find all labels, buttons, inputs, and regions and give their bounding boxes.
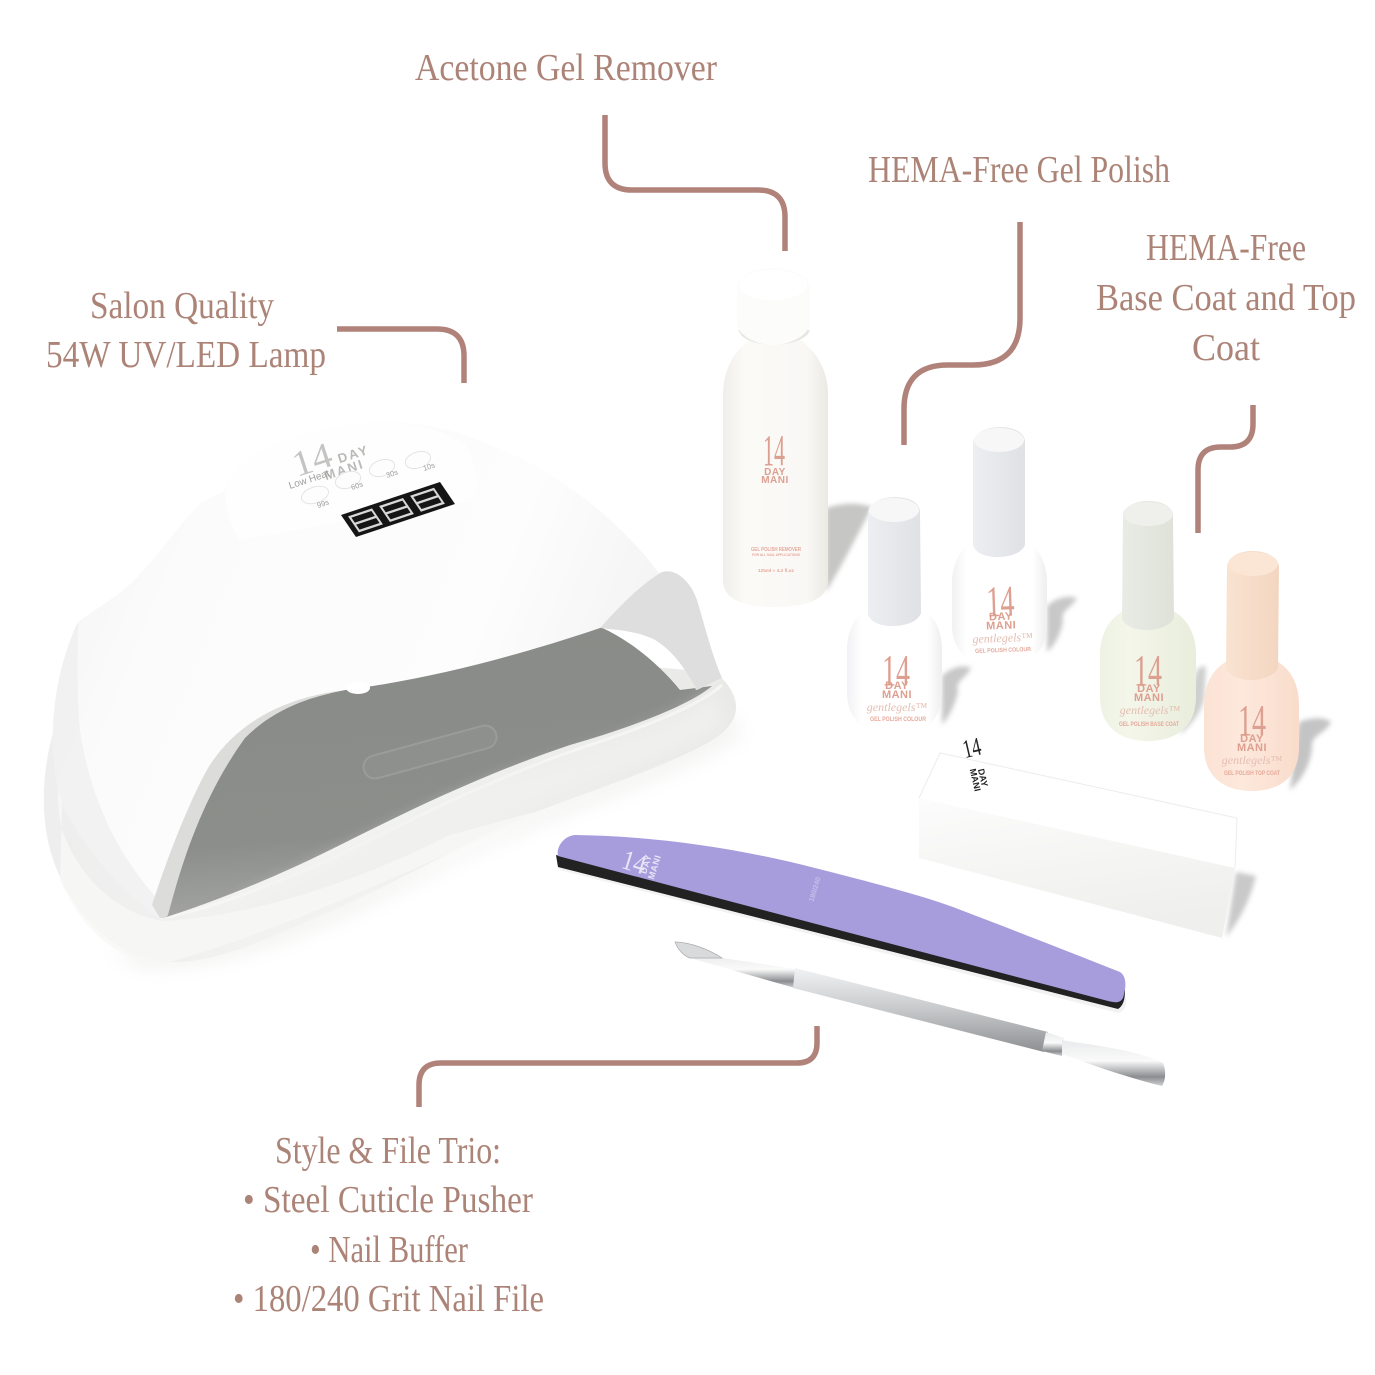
label: Salon Quality 54W UV/LED Lamp: 54W UV/LED Lamp xyxy=(46,334,326,376)
lamp interior xyxy=(163,627,712,918)
bottle logo: DAY xyxy=(1240,733,1264,745)
bottle logo xyxy=(970,576,1034,655)
UV LED lamp xyxy=(44,422,742,969)
bottle logo: 14 xyxy=(1238,696,1266,745)
cap top xyxy=(1228,552,1278,576)
bottle cap xyxy=(1226,551,1279,680)
top coat bottle xyxy=(1204,551,1331,791)
lamp interior pill xyxy=(375,737,485,767)
lamp soft floor shadow xyxy=(110,715,742,969)
bottle logo: DAY xyxy=(1137,683,1161,695)
bottle logo: MANI xyxy=(986,619,1016,632)
file black core xyxy=(556,855,1125,1009)
connector: gel polish xyxy=(904,222,1020,445)
connector: lamp xyxy=(337,329,464,383)
bottle body xyxy=(847,600,942,735)
connector: file trio xyxy=(419,1026,817,1107)
cuticle pusher xyxy=(675,942,1165,1086)
label: Salon Quality 54W UV/LED Lamp: Salon Quality xyxy=(90,285,274,327)
lamp button captions: 30s xyxy=(385,468,399,480)
base coat bottle xyxy=(1100,501,1206,741)
bottle shadow xyxy=(1047,597,1077,652)
gel polish colour bottle, front xyxy=(847,497,971,735)
bottle logo: DAY xyxy=(885,680,909,692)
buffer logo: DAY xyxy=(976,768,990,788)
connector: base and top coat xyxy=(1198,405,1253,533)
bottle logo: 14 xyxy=(882,646,910,695)
buffer logo: MANI xyxy=(968,768,983,792)
file logo: MANI xyxy=(646,854,663,880)
bottle shadow xyxy=(1290,718,1331,790)
gel remover bottle xyxy=(723,268,872,607)
bottle logo: gentlegels™ xyxy=(972,630,1033,646)
bottle cap xyxy=(973,427,1025,557)
lamp buttons xyxy=(299,448,433,507)
bottle logo: MANI xyxy=(1237,742,1267,754)
label: Salon Quality 54W UV/LED Lamp xyxy=(46,285,326,376)
file grit label: 180/240 xyxy=(809,876,823,903)
buffer shadow xyxy=(1226,872,1256,937)
lamp display xyxy=(341,482,455,537)
bottle logo: GEL POLISH COLOUR xyxy=(975,647,1032,655)
remover cap top xyxy=(739,270,807,300)
bottle logo: GEL POLISH TOP COAT xyxy=(1224,771,1280,777)
label: HEMA-Free Base Coat and Top Coat: Base Coat and Top xyxy=(1096,277,1356,319)
remover neck ring xyxy=(738,330,810,345)
bottle logo: MANI xyxy=(1134,692,1164,704)
lamp button captions: 60s xyxy=(350,480,364,492)
remover logo: DAY xyxy=(764,467,786,478)
label: Style and File Trio: • 180/240 Grit Nail File xyxy=(233,1278,544,1320)
buffer front face xyxy=(919,798,1235,938)
label: HEMA-Free Base Coat and Top Coat: HEMA-Free xyxy=(1146,227,1306,269)
cap top xyxy=(869,498,919,522)
buffer logo: 14 xyxy=(960,732,984,764)
bottle body xyxy=(1204,655,1299,791)
hood right rim band xyxy=(600,571,722,690)
nail buffer block xyxy=(919,732,1256,938)
hood left rim band xyxy=(152,690,345,918)
file logo: DAY xyxy=(638,853,654,875)
pusher shaft left xyxy=(690,954,795,988)
bottle body xyxy=(1100,605,1196,741)
bottle logo: GEL POLISH COLOUR xyxy=(870,717,927,723)
lamp logo xyxy=(287,423,375,491)
remover logo xyxy=(761,426,789,486)
bottle shadow xyxy=(1180,666,1206,735)
bottle cap xyxy=(868,497,921,626)
lamp button captions: 10s xyxy=(422,461,436,473)
buffer logo xyxy=(960,732,990,792)
lamp base xyxy=(44,640,736,962)
remover fine print xyxy=(751,547,801,573)
remover cap xyxy=(737,268,810,345)
remover shadow xyxy=(826,504,872,592)
label: Style and File Trio: Style & File Trio: xyxy=(275,1130,501,1172)
bottle logo: GEL POLISH BASE COAT xyxy=(1119,722,1179,728)
bottle shadow xyxy=(942,666,971,725)
cap top xyxy=(1123,502,1173,526)
file logo: 14 xyxy=(618,845,650,881)
bottle logo: gentlegels™ xyxy=(867,700,927,714)
lamp logo: 14 xyxy=(287,434,337,485)
remover fine print: GEL POLISH REMOVER xyxy=(751,547,801,553)
label: Style and File Trio: • Nail Buffer xyxy=(310,1229,468,1271)
bottle cap xyxy=(1122,501,1174,630)
bottle logo: gentlegels™ xyxy=(1120,703,1180,717)
pusher spoon end xyxy=(1062,1040,1165,1086)
remover fine print: FOR ALL NAIL APPLICATIONS xyxy=(752,552,800,557)
hood left shading xyxy=(53,622,163,918)
remover logo: MANI xyxy=(761,475,789,486)
hood xyxy=(53,422,720,918)
lamp button captions xyxy=(288,461,436,510)
bottle logo: gentlegels™ xyxy=(1222,753,1282,767)
cap top xyxy=(974,428,1024,452)
connector: remover xyxy=(605,115,785,251)
remover body xyxy=(723,338,828,607)
bottle logo: MANI xyxy=(882,689,912,701)
label: Style and File Trio xyxy=(233,1130,544,1320)
remover logo: 14 xyxy=(763,426,785,475)
bottle logo: 14 xyxy=(1134,646,1162,695)
bottle logo xyxy=(867,646,927,723)
file white edge xyxy=(557,858,1126,1013)
bottle body xyxy=(952,533,1047,667)
gel polish colour bottle, back xyxy=(952,427,1077,667)
bottle logo xyxy=(1222,696,1282,777)
lamp button captions: 99s xyxy=(316,498,330,510)
lamp logo: MANI xyxy=(322,456,366,483)
lamp interior pill inner xyxy=(375,737,485,767)
lamp base inner rim xyxy=(160,685,722,918)
label: HEMA-Free Base Coat and Top Coat: Coat xyxy=(1192,327,1260,369)
label: HEMA-Free Gel Polish: HEMA-Free Gel Polish xyxy=(868,149,1170,191)
nail file xyxy=(556,835,1126,1013)
pusher collar xyxy=(1042,1032,1064,1056)
label: HEMA-Free Base Coat and Top Coat xyxy=(1096,227,1356,369)
lamp base front edge xyxy=(58,740,560,962)
pusher handle xyxy=(793,968,1048,1052)
lamp interior floor glow xyxy=(230,695,725,935)
hood highlight xyxy=(346,682,370,694)
bottle logo: 14 xyxy=(986,577,1015,626)
bottle logo xyxy=(1119,646,1180,728)
pusher tip xyxy=(675,942,722,958)
buffer top face xyxy=(919,753,1237,868)
remover fine print: 125ml ℮ 4.2 fl.oz xyxy=(758,568,795,573)
label: Acetone Gel Remover: Acetone Gel Remover xyxy=(415,47,717,89)
lamp button captions: Low Heat xyxy=(288,468,331,492)
bottle logo: DAY xyxy=(989,611,1013,623)
lamp control panel xyxy=(225,422,477,540)
label: Style and File Trio: • Steel Cuticle Pusher xyxy=(243,1179,533,1221)
file purple face xyxy=(558,835,1125,1002)
buffer top outline xyxy=(919,753,1237,868)
lamp logo: DAY xyxy=(336,442,371,466)
